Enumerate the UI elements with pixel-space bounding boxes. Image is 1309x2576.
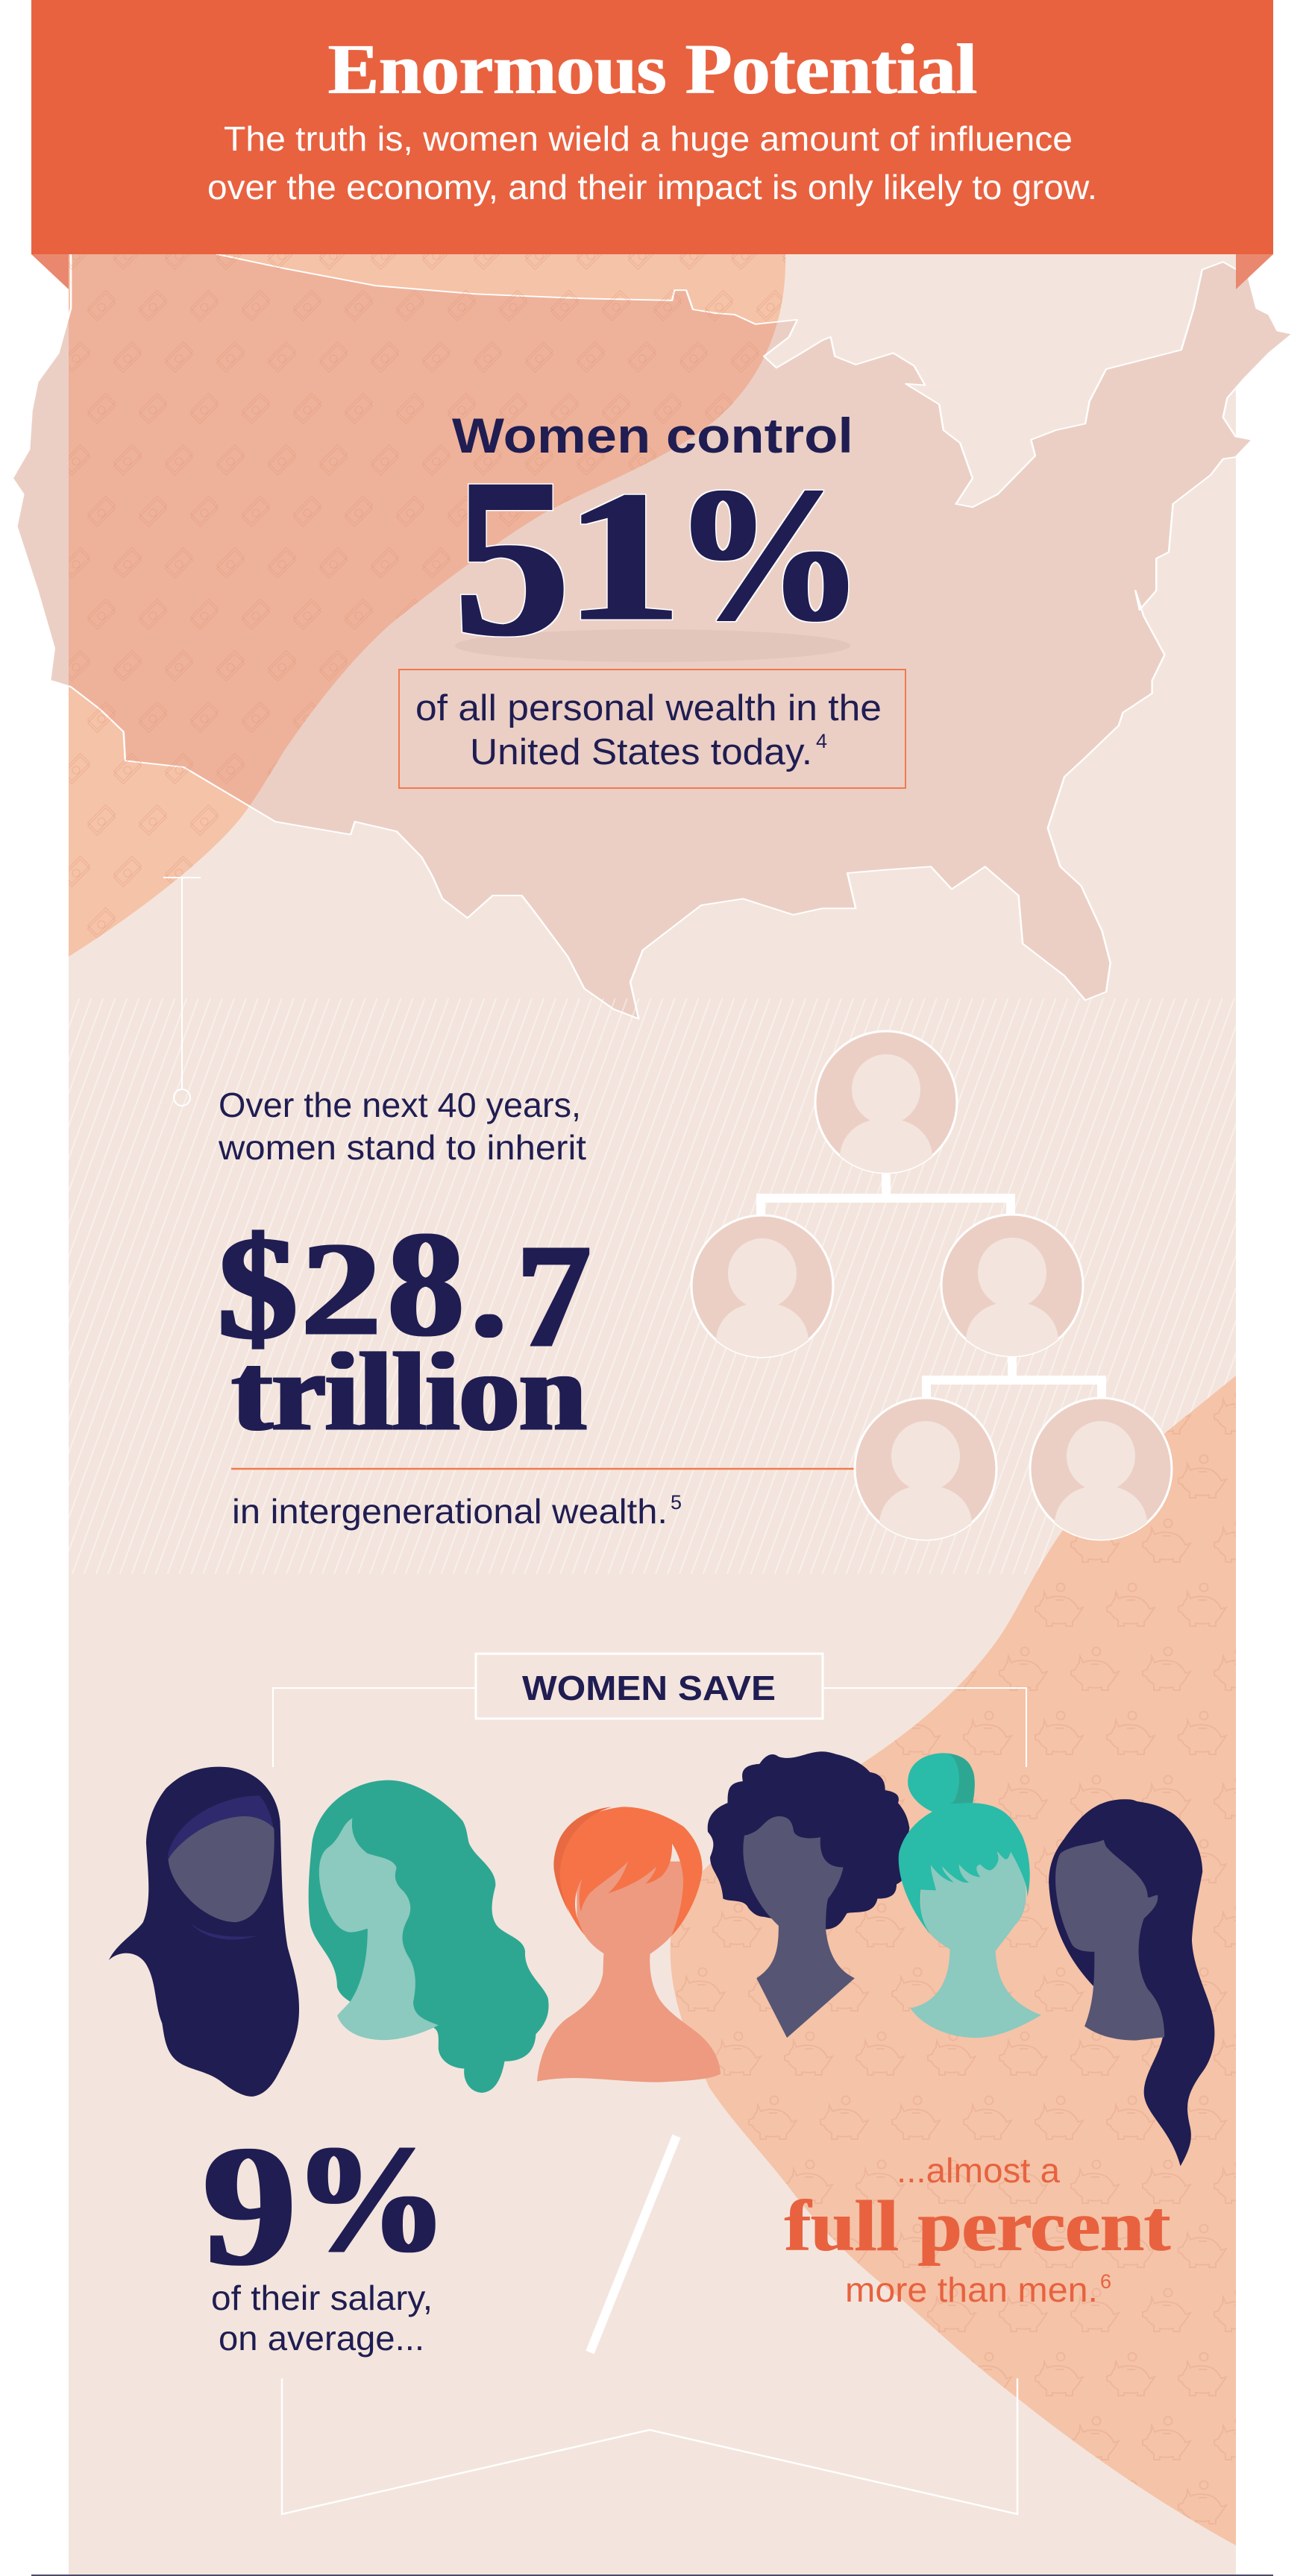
intro text: women stand to inherit <box>218 1128 586 1167</box>
women save label with brackets: WOMEN SAVE <box>522 1669 776 1707</box>
women save label with brackets <box>273 1654 1026 1767</box>
panel: inheritance section <box>69 878 1236 2545</box>
caption: intergenerational wealth: 5 <box>671 1491 682 1514</box>
big number 9% <box>203 2110 448 2302</box>
orange rule <box>231 1468 855 1470</box>
pin line with circle <box>163 878 201 1106</box>
callout: personal wealth <box>399 670 905 788</box>
big number 51%: 1 <box>565 453 682 660</box>
callout: personal wealth: of all personal wealth in the <box>415 688 882 728</box>
hatched band <box>69 998 1236 1574</box>
big number 9%: % <box>294 2113 448 2284</box>
slash divider <box>590 2136 677 2352</box>
big number $28.7 trillion: . <box>471 1210 506 1366</box>
person icon: bottom left <box>855 1398 996 1540</box>
banner fold: right <box>1236 254 1273 289</box>
subtitle <box>207 119 1097 207</box>
caption: intergenerational wealth: in intergenerational wealth. <box>232 1492 668 1531</box>
intro text: Over the next 40 years, <box>219 1086 581 1124</box>
big number 51%: 5 <box>454 431 570 683</box>
big number $28.7 trillion: 2 <box>301 1215 381 1363</box>
big number 51%: % <box>674 447 864 661</box>
woman in hijab <box>109 1767 299 2097</box>
big number $28.7 trillion: $ <box>218 1206 298 1370</box>
callout: personal wealth: 4 <box>816 730 827 752</box>
comparison: full percent more than men: more than men. <box>845 2270 1098 2309</box>
person icon: bottom right <box>1030 1398 1172 1540</box>
comparison: full percent more than men: full percent <box>785 2186 1170 2267</box>
bottom ribbon outline <box>282 2378 1017 2514</box>
woman with wavy teal hair <box>309 1780 549 2093</box>
heading: Women control: Women control <box>452 408 853 463</box>
woman with long dark hair <box>1049 1799 1214 2166</box>
peach background blob <box>69 254 785 957</box>
person icon: middle left <box>691 1215 833 1357</box>
title: Enormous Potential <box>328 29 977 109</box>
woman with teal bun <box>899 1753 1041 2038</box>
big number $28.7 trillion: 8 <box>388 1200 464 1367</box>
bottom rule <box>31 2575 1273 2576</box>
peach lower-right blob with piggy banks <box>671 1376 1236 2545</box>
shadow under 51% <box>455 629 850 662</box>
big number $28.7 trillion: trillion <box>232 1330 586 1454</box>
big number $28.7 trillion: 7 <box>517 1214 591 1379</box>
big number 51% <box>454 431 864 683</box>
banner fold: left <box>31 254 69 289</box>
caption: of their salary: on average... <box>219 2319 424 2358</box>
panel: map section <box>13 244 1293 1018</box>
comparison: full percent more than men: 6 <box>1100 2270 1111 2293</box>
caption: of their salary <box>211 2279 433 2358</box>
subtitle: over the economy, and their impact is only likely to grow. <box>207 168 1097 207</box>
subtitle: The truth is, women wield a huge amount of influence <box>224 119 1073 158</box>
money pattern <box>69 254 785 957</box>
person icon: top <box>815 1031 957 1173</box>
map of the United States <box>13 244 1293 1018</box>
person icon: middle right <box>941 1215 1083 1356</box>
caption: of their salary: of their salary, <box>211 2279 433 2317</box>
illustration: five other women <box>109 1751 1214 2166</box>
family tree connectors <box>761 1171 1102 1399</box>
panel: title banner <box>31 0 1273 254</box>
woman with curly hair <box>708 1751 909 2038</box>
callout: personal wealth: United States today. <box>470 732 812 772</box>
comparison: full percent more than men <box>785 2151 1170 2309</box>
big number 9%: 9 <box>203 2110 296 2302</box>
illustration: woman with orange hair <box>537 1807 721 2082</box>
panel: women save section <box>109 1654 1214 2514</box>
comparison: full percent more than men: ...almost a <box>897 2151 1060 2190</box>
big number $28.7 trillion <box>218 1200 591 1454</box>
intro text <box>218 1086 586 1167</box>
